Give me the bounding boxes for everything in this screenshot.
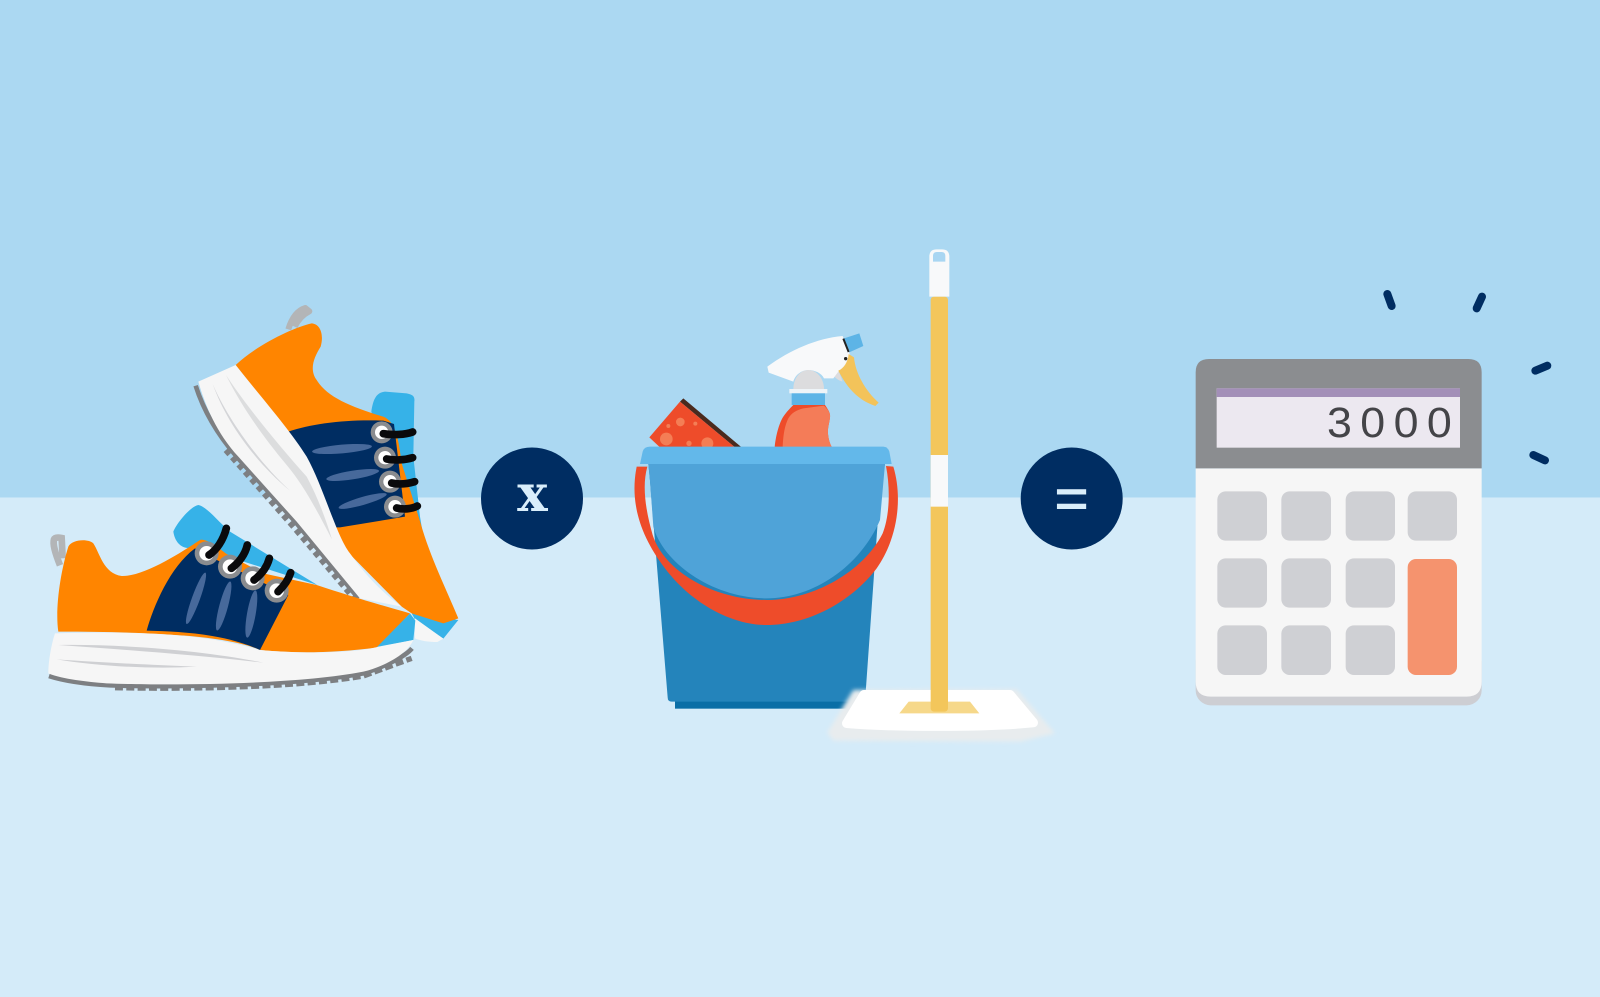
mop handle: [929, 249, 949, 712]
icon: calculator: [1196, 294, 1547, 705]
icon: equals operator: =: [1055, 466, 1088, 532]
back sneaker: [196, 308, 458, 642]
bucket handle: [634, 466, 898, 625]
calculator header: [1196, 359, 1482, 468]
background: floor: [0, 498, 1600, 997]
icon: cleaning bucket with spray and sponge: [634, 333, 898, 709]
calculator body: [1196, 468, 1482, 697]
mop head: [827, 689, 1055, 742]
calculator shadow: [1196, 647, 1482, 705]
icon: multiply operator: [481, 448, 583, 550]
front sneaker eyelets and laces: [195, 528, 291, 603]
background: sky wall: [0, 0, 1600, 498]
front sneaker: [48, 505, 415, 688]
spray bottle: [767, 333, 879, 447]
sponge: [649, 398, 742, 449]
icon: equals operator: [1021, 448, 1123, 550]
bucket: [640, 447, 892, 709]
icon: mop: [827, 249, 1055, 742]
calculator display: 3000: [1327, 399, 1460, 447]
sparkle ticks: [1387, 294, 1547, 460]
calculator orange key: [1408, 559, 1457, 675]
icon: pair of sneakers: [48, 308, 458, 688]
calculator keys: [1217, 491, 1457, 675]
icon: multiply operator: x: [517, 464, 548, 524]
back sneaker eyelets and laces: [371, 421, 417, 518]
calculator display: [1217, 388, 1460, 448]
